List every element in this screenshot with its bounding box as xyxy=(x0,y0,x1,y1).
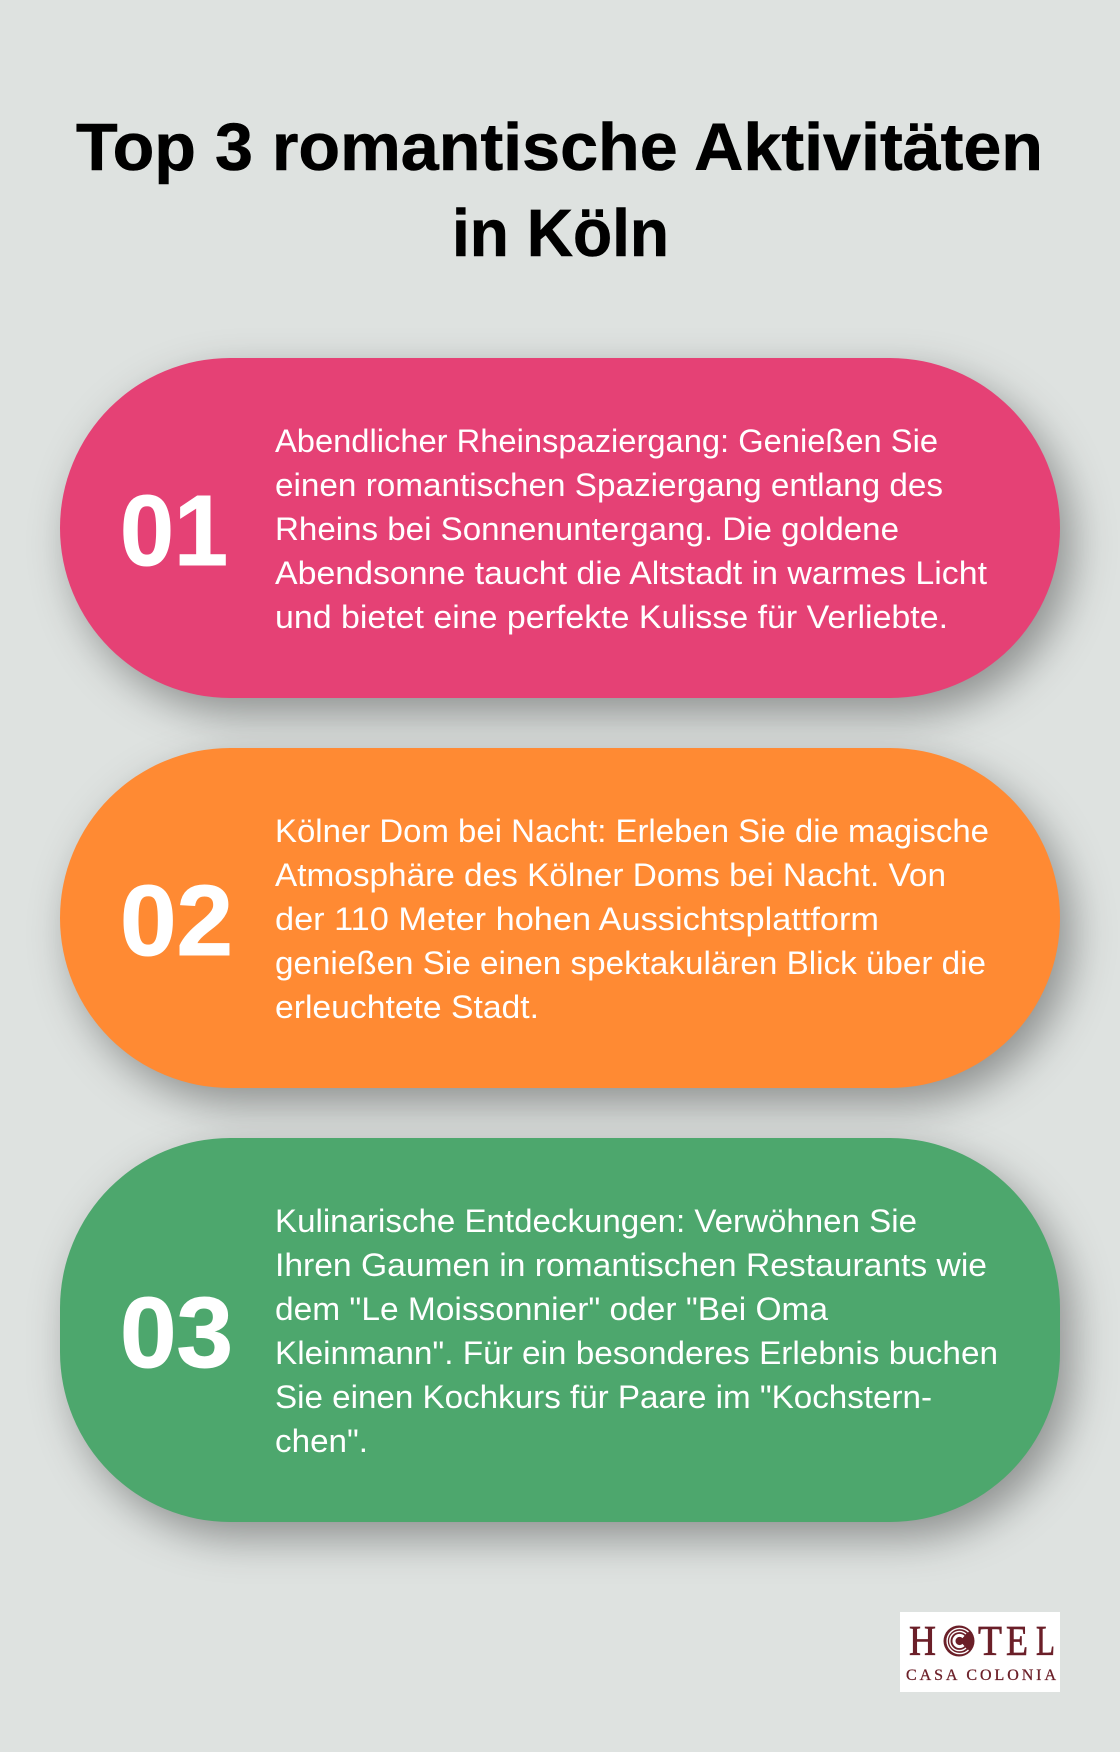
text: activity 01 description: Abendsonne taucht die Altstadt in warmes Licht xyxy=(275,555,987,591)
text: activity 02 description xyxy=(275,813,989,1025)
text: activity 03 description: chen". xyxy=(275,1423,368,1459)
logo wordmark: T xyxy=(978,1619,1002,1665)
text: activity 02 description: der 110 Meter hohen Aussichtsplattform xyxy=(275,901,879,937)
number 01: 01 xyxy=(120,475,228,587)
text: activity 03 description xyxy=(275,1203,998,1459)
text: activity 02 description: Atmosphäre des Kölner Doms bei Nacht. Von xyxy=(275,857,946,893)
logo wordmark: CASA COLONIA xyxy=(906,1667,1056,1684)
title: Top 3 romantische Aktivitäten xyxy=(76,110,1043,185)
number 03: 03 xyxy=(120,1277,233,1389)
logo wordmark: H xyxy=(909,1619,936,1665)
logo emblem: concentric C xyxy=(944,1626,974,1656)
text: activity 01 description: Rheins bei Sonnenuntergang. Die goldene xyxy=(275,511,899,547)
logo wordmark: E xyxy=(1006,1619,1028,1665)
text: activity 01 description xyxy=(275,423,987,635)
text: activity 01 description: einen romantischen Spaziergang entlang des xyxy=(275,467,943,503)
panel: activity 03 xyxy=(60,1138,1072,1538)
text: activity 02 description: erleuchtete Stadt. xyxy=(275,989,539,1025)
text: activity 03 description: dem "Le Moissonnier" oder "Bei Oma xyxy=(275,1291,828,1327)
text: activity 03 description: Ihren Gaumen in romantischen Restaurants wie xyxy=(275,1247,987,1283)
panel: activity 02 xyxy=(60,748,1072,1104)
number 02: 02 xyxy=(120,865,233,977)
logo: Hotel Casa Colonia xyxy=(900,1612,1060,1692)
text: activity 03 description: Kulinarische Entdeckungen: Verwöhnen Sie xyxy=(275,1203,917,1239)
title xyxy=(76,110,1043,271)
text: activity 03 description: Kleinmann". Für ein besonderes Erlebnis buchen xyxy=(275,1335,998,1371)
logo wordmark xyxy=(906,1619,1056,1684)
text: activity 03 description: Sie einen Kochkurs für Paare im "Kochstern- xyxy=(275,1379,932,1415)
title: in Köln xyxy=(452,196,669,271)
text: activity 01 description: Abendlicher Rheinspaziergang: Genießen Sie xyxy=(275,423,938,459)
logo wordmark: L xyxy=(1036,1619,1055,1665)
text: activity 01 description: und bietet eine perfekte Kulisse für Verliebte. xyxy=(275,599,948,635)
panel: activity 01 xyxy=(60,358,1072,714)
text: activity 02 description: genießen Sie einen spektakulären Blick über die xyxy=(275,945,986,981)
text: activity 02 description: Kölner Dom bei Nacht: Erleben Sie die magische xyxy=(275,813,989,849)
